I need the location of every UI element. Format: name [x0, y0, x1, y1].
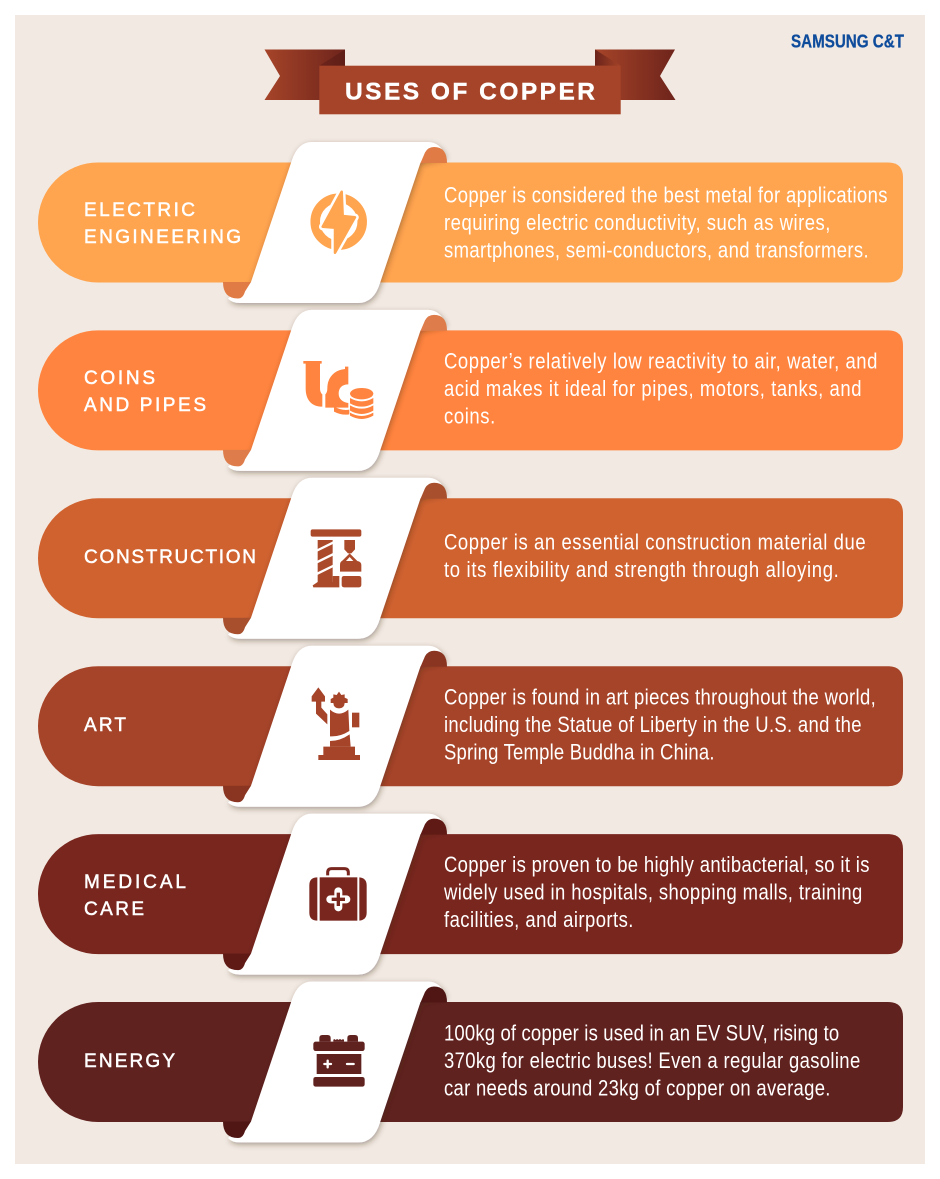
- description: Copper is proven to be highly antibacterial, so it is: [444, 854, 869, 877]
- description: Copper is an essential construction material due: [444, 531, 866, 555]
- logo: Samsung C&T: SAMSUNG C&T: [791, 30, 905, 52]
- white panel: [228, 478, 446, 639]
- description: 100kg of copper is used in an EV SUV, rising to: [444, 1022, 839, 1046]
- description: 370kg for electric buses! Even a regular gasoline: [444, 1050, 860, 1073]
- label: ENERGY: [84, 1051, 175, 1072]
- description: facilities, and airports.: [444, 909, 633, 932]
- white panel: [228, 814, 446, 975]
- band: [38, 498, 903, 618]
- icon: lightning bolt: [315, 192, 362, 253]
- icon: pipes and coins: [303, 361, 373, 419]
- folds: [223, 819, 447, 970]
- label: MEDICAL: [84, 872, 186, 893]
- description: acid makes it ideal for pipes, motors, tanks, and: [444, 378, 861, 402]
- folds: [223, 483, 447, 634]
- title ribbon: [264, 50, 676, 114]
- white panel: [228, 982, 446, 1142]
- band: [38, 162, 903, 282]
- folds: [223, 315, 447, 466]
- row: electric engineering: [38, 142, 903, 303]
- description: smartphones, semi-conductors, and transformers.: [444, 239, 869, 263]
- band: [38, 330, 903, 450]
- label: ART: [84, 715, 126, 736]
- row: coins and pipes: [38, 310, 903, 471]
- description: Spring Temple Buddha in China.: [444, 741, 714, 765]
- description: coins.: [444, 405, 495, 429]
- band: [38, 834, 903, 954]
- icon: car battery: [313, 1035, 365, 1087]
- icon: medical case: [309, 869, 367, 921]
- white panel: [228, 142, 446, 303]
- description: widely used in hospitals, shopping malls, training: [443, 881, 862, 905]
- description: to its flexibility and strength through alloying.: [444, 559, 839, 583]
- description: Copper is found in art pieces throughout the world,: [444, 686, 876, 710]
- row: medical care: [38, 814, 903, 975]
- row: construction: [38, 478, 903, 639]
- label: CONSTRUCTION: [84, 547, 256, 568]
- folds: [223, 147, 447, 298]
- row: art: [38, 646, 903, 807]
- label: ELECTRIC: [84, 200, 195, 221]
- band: [38, 666, 903, 786]
- description: car needs around 23kg of copper on average.: [444, 1077, 830, 1101]
- label: COINS: [84, 368, 155, 389]
- row: energy: [38, 982, 903, 1142]
- folds: [223, 651, 447, 802]
- description: Copper’s relatively low reactivity to air, water, and: [444, 350, 877, 374]
- icon: crane and column: [311, 529, 361, 587]
- title: USES OF COPPER: [345, 78, 595, 106]
- folds: [223, 986, 447, 1138]
- icon: statue of liberty: [312, 687, 360, 760]
- white panel: [228, 310, 446, 471]
- description: requiring electric conductivity, such as wires,: [444, 212, 830, 235]
- label: CARE: [84, 899, 144, 920]
- description: Copper is considered the best metal for applications: [444, 184, 888, 208]
- band: [38, 1002, 903, 1122]
- label: ENGINEERING: [84, 227, 241, 248]
- white panel: [228, 646, 446, 807]
- label: AND PIPES: [84, 395, 206, 416]
- description: including the Statue of Liberty in the U.S. and the: [444, 714, 861, 738]
